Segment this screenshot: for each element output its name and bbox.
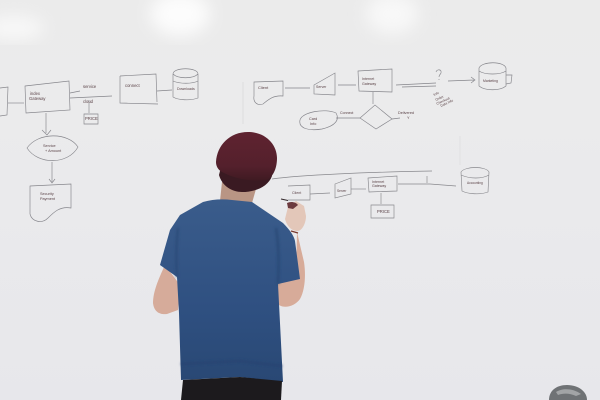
right arm	[277, 232, 305, 307]
flowchart labels: upper right: Internet	[362, 77, 374, 81]
flowchart labels: upper right: Info	[433, 91, 440, 97]
arrow to cylinder	[448, 77, 475, 83]
flowchart labels: left	[29, 83, 195, 201]
trousers	[181, 377, 282, 400]
trapezoid	[335, 178, 351, 198]
flowchart labels: left: Gateway	[29, 96, 46, 101]
flowchart labels: lower right: Internet	[372, 180, 384, 184]
flowchart labels: upper right: Delivered	[398, 111, 414, 115]
left arm	[153, 265, 180, 314]
flowchart labels: upper right: Checkout	[436, 96, 450, 106]
flowchart labels: left: Security	[40, 192, 54, 196]
flowchart labels: lower right: Accounting	[467, 181, 483, 185]
flowchart labels: left: service	[83, 84, 97, 89]
small box below	[371, 193, 394, 218]
flowchart labels: lower right: Gateway	[372, 184, 386, 188]
object: dark device at bottom right	[549, 385, 587, 400]
box: cut off left edge	[0, 87, 8, 116]
document shape	[254, 81, 283, 105]
flowchart labels: upper right	[258, 77, 498, 126]
flowchart: upper right	[243, 63, 512, 130]
flowchart: lower right	[272, 136, 489, 218]
flowchart labels: left: + Amount	[45, 149, 62, 153]
flowchart labels: upper right: Client	[258, 85, 269, 90]
question mark	[436, 70, 441, 80]
flowchart labels: upper right: Card	[309, 117, 317, 121]
beanie	[216, 132, 277, 192]
cylinder: database	[173, 69, 198, 100]
flowchart labels: left: cloud	[83, 99, 94, 104]
box: middle	[120, 74, 158, 104]
box: main	[25, 81, 70, 113]
person	[153, 132, 306, 400]
cylinder	[479, 63, 512, 90]
flowchart labels: left: Service	[43, 144, 56, 148]
cylinder	[461, 168, 489, 194]
connector to diamond	[372, 92, 374, 104]
lens shape	[27, 136, 78, 161]
neck	[220, 182, 258, 203]
flowchart labels: left: connect	[125, 83, 141, 88]
vertical arrow 2	[49, 162, 55, 183]
flowchart: left	[0, 69, 198, 221]
flowchart labels: left: index	[30, 91, 41, 96]
document shape	[30, 184, 71, 221]
box	[288, 185, 310, 200]
flowchart labels: left: Downloads	[177, 87, 195, 91]
flowchart labels: lower right: Client	[292, 191, 301, 195]
light reflections on whiteboard	[0, 0, 418, 40]
flowchart labels: left: Payment	[40, 197, 56, 201]
flowchart labels: upper right: Connect	[340, 111, 353, 115]
flowchart labels: upper right: Order	[435, 94, 445, 102]
flowchart labels: upper right: Data Info	[440, 98, 454, 108]
flowchart labels: upper right: Marketing	[483, 79, 498, 83]
box	[368, 176, 397, 192]
shirt shading	[176, 228, 282, 366]
wristband	[291, 231, 298, 233]
flowchart labels: lower right	[292, 180, 483, 214]
small box	[84, 100, 98, 124]
connector lines	[70, 91, 112, 98]
hand with marker	[281, 199, 306, 231]
flowchart labels: lower right: Server	[337, 189, 347, 193]
box	[358, 69, 392, 92]
vertical arrow	[42, 113, 51, 135]
flowchart labels: upper right: Info	[310, 122, 316, 126]
t-shirt	[160, 199, 300, 382]
flowchart labels: upper right: Gateway	[362, 82, 376, 86]
flowchart labels: upper right: Y	[407, 116, 410, 120]
oval	[300, 111, 337, 130]
flowchart labels: upper right: Server	[316, 85, 327, 89]
flowchart labels: left: PRICE	[85, 116, 98, 121]
trapezoid	[314, 73, 335, 95]
flowchart labels: lower right: PRICE	[377, 209, 390, 214]
diamond	[360, 105, 392, 129]
